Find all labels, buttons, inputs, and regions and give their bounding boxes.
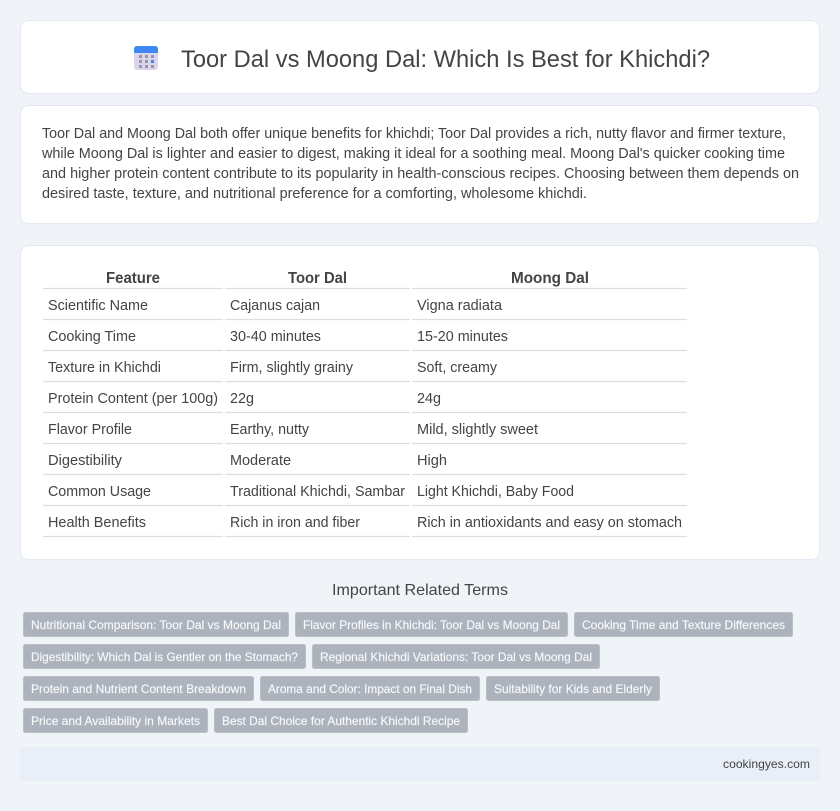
- row: cooking time: 15-20 minutes: [417, 329, 508, 345]
- description text: Toor Dal and Moong Dal both offer unique benefits for khichdi; Toor Dal provides a rich, nutty flavor and firmer texture,: [42, 126, 786, 142]
- row: texture: [48, 360, 498, 376]
- tag: [214, 708, 468, 732]
- row: health benefits: Health Benefits: [48, 515, 146, 531]
- description text: and higher protein content contribute to its popularity in health-conscious recipes. Choosing between them depends on: [42, 166, 799, 182]
- row: flavor profile: Earthy, nutty: [230, 422, 310, 438]
- tag: Best Dal Choice for Authentic Khichdi Recipe: [222, 714, 460, 728]
- row: scientific name: Cajanus cajan: [230, 298, 320, 314]
- row: scientific name: [48, 298, 502, 314]
- table header row: Moong Dal: [511, 270, 589, 287]
- row: scientific name: Scientific Name: [48, 298, 148, 314]
- tag: [260, 676, 480, 700]
- row: flavor profile: Flavor Profile: [48, 422, 132, 438]
- tag: [296, 612, 568, 636]
- row: flavor profile: Mild, slightly sweet: [417, 422, 538, 438]
- row: flavor profile: [48, 422, 538, 438]
- heading: related terms: Important Related Terms: [332, 582, 508, 599]
- row: protein content: 24g: [417, 391, 441, 407]
- tag: [24, 644, 306, 668]
- table header row: Toor Dal: [288, 270, 347, 287]
- tag: Cooking Time and Texture Differences: [582, 618, 785, 632]
- tag: Regional Khichdi Variations: Toor Dal vs Moong Dal: [320, 650, 592, 664]
- footer bar: [20, 747, 820, 781]
- row: digestibility: Digestibility: [48, 453, 123, 469]
- header panel: [20, 20, 820, 94]
- row: digestibility: High: [417, 453, 447, 469]
- tag: Suitability for Kids and Elderly: [494, 682, 652, 696]
- table header row: [106, 270, 589, 287]
- row: cooking time: [48, 329, 508, 345]
- tag: [574, 612, 792, 636]
- row: digestibility: Moderate: [230, 453, 291, 469]
- row: common usage: [48, 484, 574, 500]
- row: protein content: [48, 391, 441, 407]
- row: digestibility: [48, 453, 447, 469]
- title: Toor Dal vs Moong Dal: Which Is Best for Khichdi?: [181, 46, 710, 73]
- icon: calendar: [134, 46, 158, 70]
- tag: Aroma and Color: Impact on Final Dish: [268, 682, 472, 696]
- row: texture: Firm, slightly grainy: [230, 360, 354, 376]
- related term tags: [24, 612, 792, 732]
- description text: [41, 126, 799, 202]
- tag: [24, 612, 288, 636]
- row: common usage: Traditional Khichdi, Sambar: [230, 484, 405, 500]
- row: cooking time: 30-40 minutes: [230, 329, 321, 345]
- row: health benefits: [48, 515, 682, 531]
- row: cooking time: Cooking Time: [48, 329, 136, 345]
- panel: description: [20, 106, 820, 224]
- tag: [24, 708, 208, 732]
- row: protein content: 22g: [230, 391, 254, 407]
- tag: Digestibility: Which Dal is Gentler on the Stomach?: [31, 650, 298, 664]
- tag: [24, 676, 254, 700]
- description text: desired taste, texture, and nutritional preference for a comforting, wholesome khichdi.: [42, 186, 587, 202]
- row: protein content: Protein Content (per 100g): [48, 391, 218, 407]
- tag: Flavor Profiles in Khichdi: Toor Dal vs Moong Dal: [303, 618, 560, 632]
- tag: Protein and Nutrient Content Breakdown: [31, 682, 246, 696]
- row: texture: Soft, creamy: [417, 360, 498, 376]
- tag: [312, 644, 600, 668]
- table header row: Feature: [106, 270, 160, 287]
- row: health benefits: Rich in antioxidants and easy on stomach: [417, 515, 682, 531]
- tag: Nutritional Comparison: Toor Dal vs Moong Dal: [31, 618, 281, 632]
- tag: [486, 676, 660, 700]
- row: common usage: Common Usage: [48, 484, 151, 500]
- row: health benefits: Rich in iron and fiber: [230, 515, 360, 531]
- row: texture: Texture in Khichdi: [48, 360, 161, 376]
- tag: Price and Availability in Markets: [31, 714, 200, 728]
- row: common usage: Light Khichdi, Baby Food: [417, 484, 574, 500]
- footer bar: cookingyes.com: [723, 757, 810, 771]
- description text: while Moong Dal is lighter and easier to digest, making it ideal for a soothing meal. Moong Dal's quicker cooking time: [41, 146, 785, 162]
- row: scientific name: Vigna radiata: [417, 298, 502, 314]
- panel: comparison table: [20, 246, 820, 560]
